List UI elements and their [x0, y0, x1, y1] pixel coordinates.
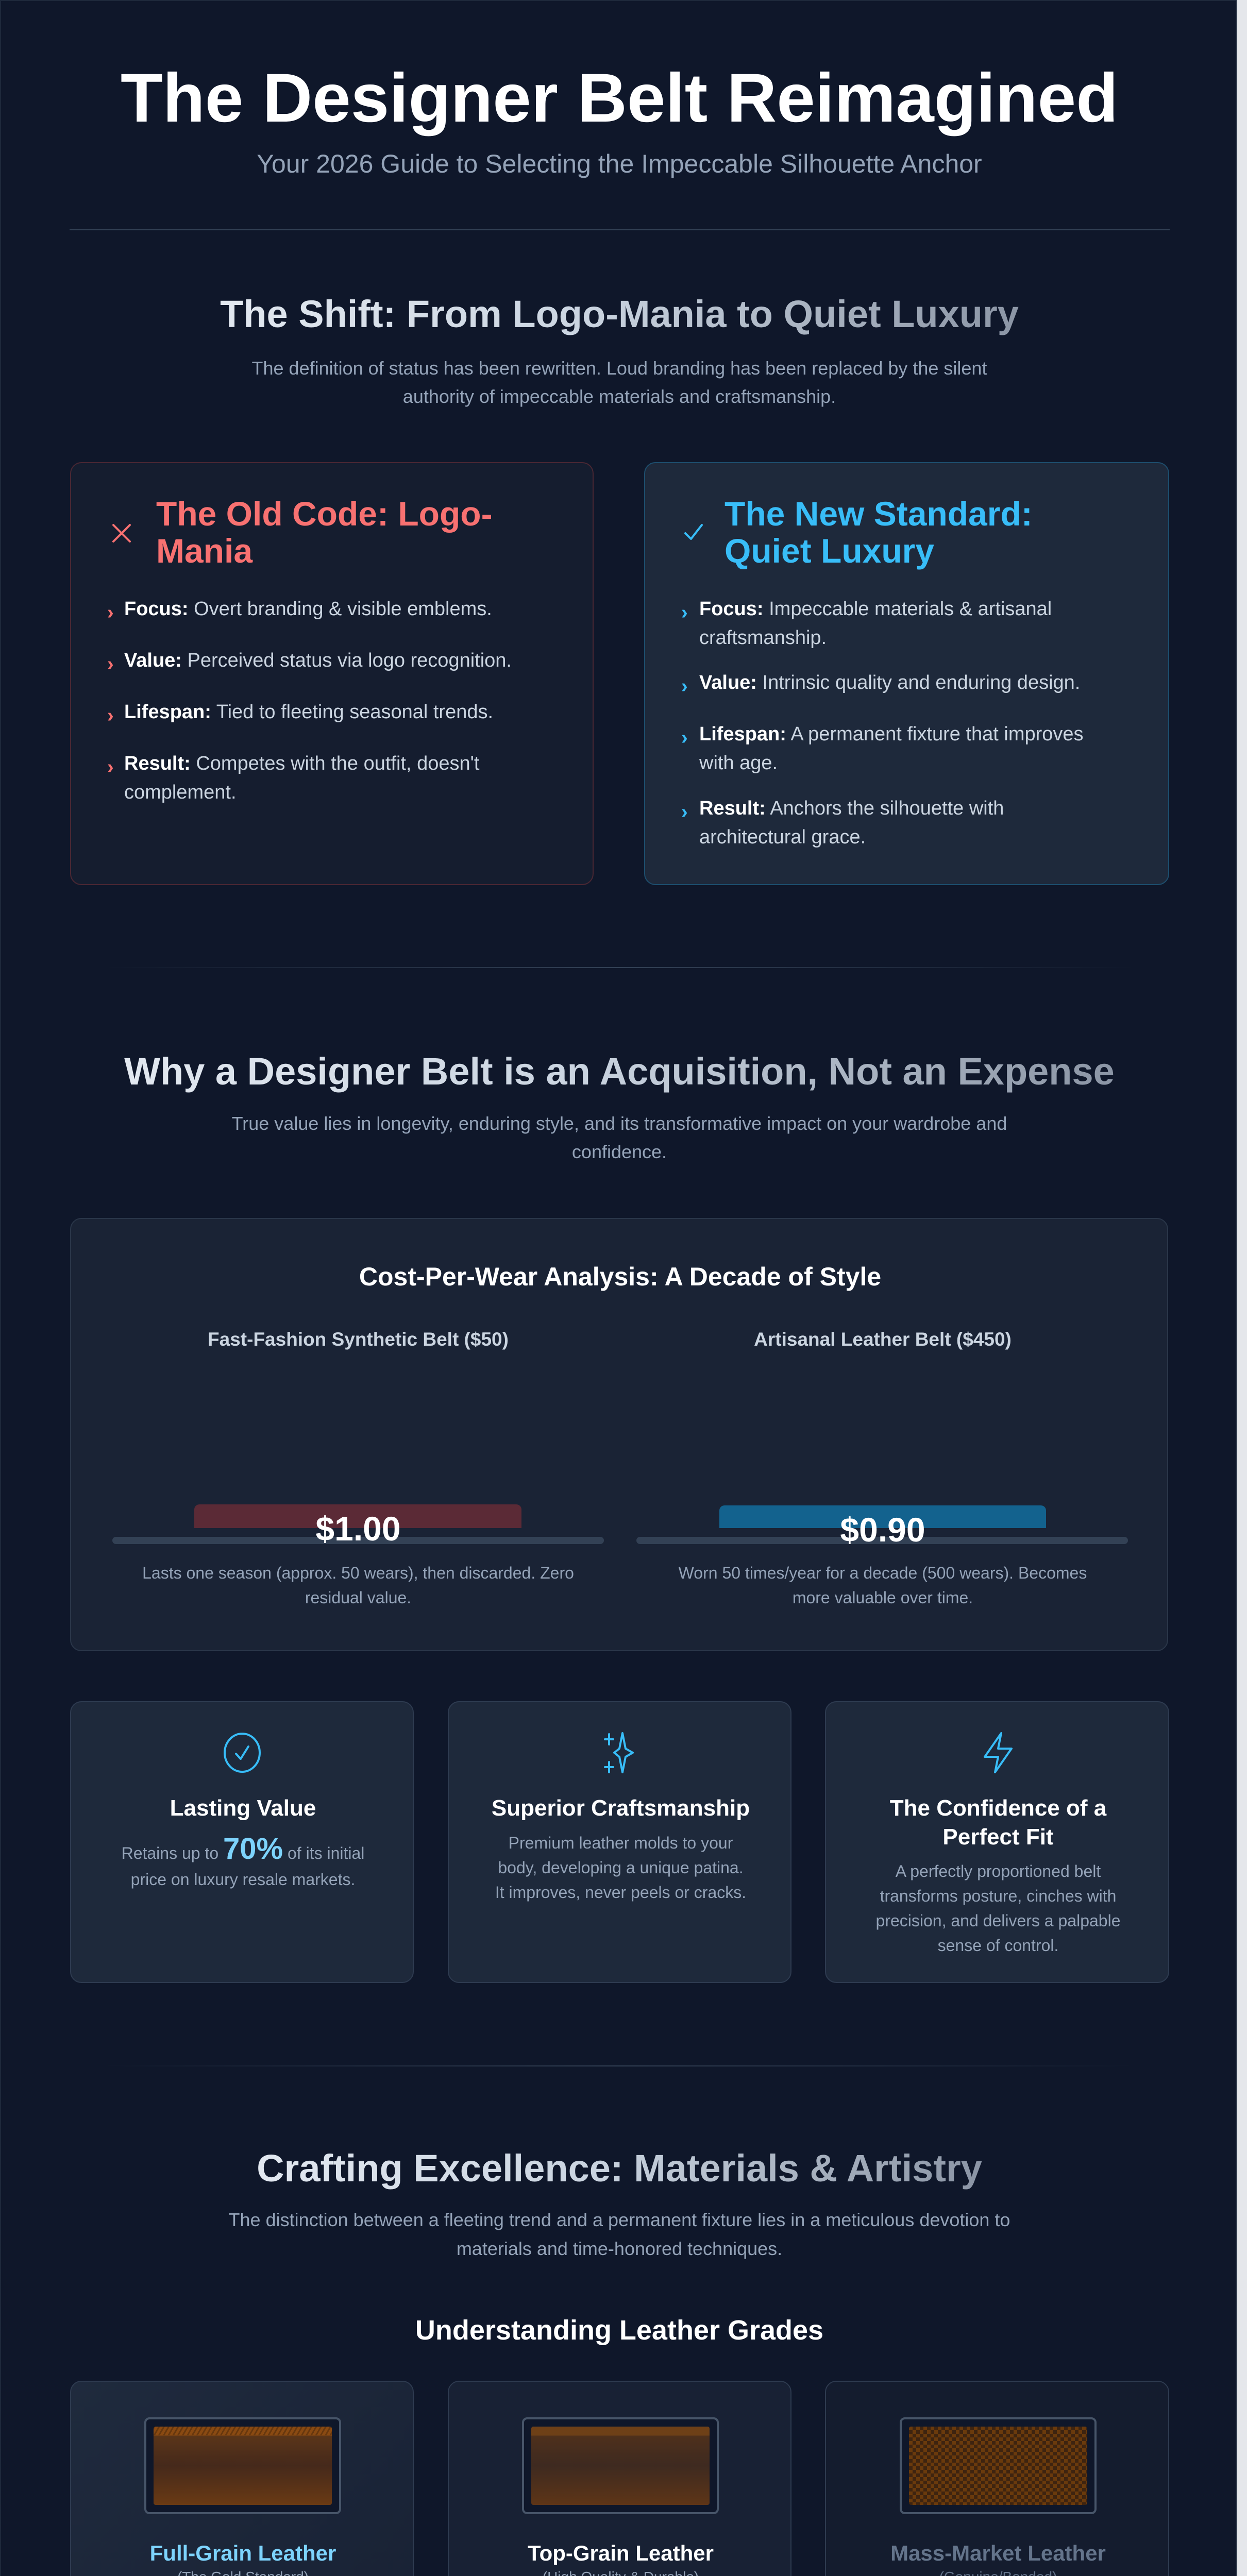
- label: artisanal: Artisanal Leather Belt ($450): [754, 1329, 1012, 1350]
- list: new standard points: Focus: Impeccable materials & artisanal: [699, 598, 1052, 620]
- name: Top-Grain Leather: [528, 2541, 714, 2565]
- icon: cross: [112, 523, 131, 543]
- description: transforms posture, cinches with: [880, 1887, 1116, 1905]
- note: artisanal: [678, 1564, 1087, 1607]
- note: fast fashion: [142, 1564, 574, 1607]
- description: precision, and delivers a palpable: [876, 1911, 1120, 1930]
- intro text: the shift: authority of impeccable materials and craftsmanship.: [403, 386, 836, 407]
- description: It improves, never peels or cracks.: [495, 1883, 746, 1902]
- heading: new standard: The New Standard:: [724, 495, 1033, 533]
- intro text: acquisition: True value lies in longevity, enduring style, and its transformative impact on your wardrobe and: [232, 1113, 1007, 1134]
- heading: new standard: Quiet Luxury: [724, 532, 934, 570]
- list: old code points: ›: [107, 653, 114, 675]
- list: new standard points: Result: Anchors the silhouette with: [699, 798, 1004, 819]
- heading: new standard: [724, 495, 1033, 570]
- intro text: the shift: [252, 358, 987, 407]
- label: fast fashion: Fast-Fashion Synthetic Belt ($50): [208, 1329, 509, 1350]
- subheading: leather grades: Understanding Leather Grades: [415, 2315, 823, 2346]
- icon: sparkles: [604, 1732, 634, 1773]
- description: A perfectly proportioned belt: [896, 1862, 1101, 1880]
- title: The Confidence of a: [890, 1795, 1106, 1821]
- note: artisanal: more valuable over time.: [793, 1588, 973, 1607]
- note: fast fashion: Lasts one season (approx. 50 wears), then discarded. Zero: [142, 1564, 574, 1582]
- description: body, developing a unique patina.: [498, 1858, 744, 1877]
- list: old code points: Focus: Overt branding & visible emblems.: [124, 598, 492, 620]
- list: old code points: Result: Competes with the outfit, doesn't: [124, 753, 479, 774]
- panel: top-grain: [448, 2381, 791, 2576]
- heading: old code: The Old Code: Logo-: [156, 495, 493, 533]
- title: Superior Craftsmanship: [492, 1795, 750, 1821]
- intro text: acquisition: confidence.: [572, 1141, 667, 1162]
- list: new standard points: architectural grace.: [699, 826, 866, 848]
- list: old code points: ›: [107, 756, 114, 778]
- intro text: crafting: materials and time-honored techniques.: [457, 2238, 782, 2259]
- list: new standard points: ›: [681, 602, 688, 623]
- panel: full-grain: [70, 2381, 414, 2576]
- bar: artisanal: [719, 1505, 1046, 1528]
- list: old code points: Lifespan: Tied to fleeting seasonal trends.: [124, 701, 493, 723]
- swatch: mass-market: [900, 2417, 1097, 2514]
- description: price on luxury resale markets.: [131, 1870, 355, 1889]
- note: artisanal: Worn 50 times/year for a decade (500 wears). Becomes: [679, 1564, 1087, 1582]
- icon: check: [684, 523, 703, 540]
- name: Mass-Market Leather: [890, 2541, 1106, 2565]
- list: new standard points: ›: [681, 675, 688, 697]
- list: new standard points: ›: [681, 801, 688, 823]
- title: Lasting Value: [170, 1795, 316, 1821]
- heading: old code: [156, 495, 493, 570]
- intro text: the shift: The definition of status has been rewritten. Loud branding has been replaced by the silent: [252, 358, 987, 379]
- list: new standard points: with age.: [699, 752, 778, 774]
- value: $1.00: $1.00: [315, 1510, 401, 1548]
- swatch: full-grain: [144, 2417, 341, 2514]
- heading: the shift: The Shift: From Logo-Mania to Quiet Luxury: [220, 293, 1019, 335]
- description: [876, 1862, 1120, 1955]
- list: new standard points: Lifespan: A permanent fixture that improves: [699, 723, 1084, 745]
- title: [890, 1795, 1107, 1850]
- chart title: Cost-Per-Wear Analysis: A Decade of Style: [359, 1262, 881, 1291]
- heading: old code: Mania: [156, 532, 252, 570]
- swatch: top-grain: [522, 2417, 719, 2514]
- bar: fast fashion: [194, 1504, 521, 1528]
- panel: lasting value: [70, 1701, 414, 1983]
- description: sense of control.: [938, 1936, 1058, 1955]
- icon: lightning: [983, 1732, 1013, 1773]
- intro text: acquisition: [232, 1113, 1007, 1162]
- note: fast fashion: residual value.: [305, 1588, 411, 1607]
- heading: crafting excellence: Crafting Excellence: Materials & Artistry: [257, 2147, 982, 2190]
- list: old code points: complement.: [124, 782, 237, 803]
- list: old code points: Value: Perceived status via logo recognition.: [124, 650, 512, 671]
- description: [495, 1834, 746, 1902]
- name: Full-Grain Leather: [150, 2541, 336, 2565]
- list: old code points: [107, 598, 512, 803]
- panel: cost-per-wear chart: [70, 1218, 1168, 1651]
- panel: old code: [70, 462, 594, 885]
- description: [122, 1832, 364, 1889]
- description: Retains up to 70% of its initial: [122, 1832, 364, 1866]
- heading: acquisition: Why a Designer Belt is an Acquisition, Not an Expense: [124, 1050, 1115, 1093]
- list: new standard points: Value: Intrinsic quality and enduring design.: [699, 672, 1080, 693]
- intro text: crafting: The distinction between a fleeting trend and a permanent fixture lies in a meticulous devotion to: [229, 2209, 1010, 2230]
- description: Premium leather molds to your: [509, 1834, 733, 1852]
- panel: craftsmanship: [448, 1701, 791, 1983]
- list: new standard points: craftsmanship.: [699, 627, 827, 649]
- list: new standard points: [681, 598, 1084, 848]
- list: old code points: ›: [107, 602, 114, 623]
- list: new standard points: ›: [681, 727, 688, 749]
- title: Perfect Fit: [942, 1824, 1054, 1850]
- value: $0.90: $0.90: [840, 1511, 925, 1549]
- panel: confidence: [825, 1701, 1169, 1983]
- list: old code points: ›: [107, 705, 114, 726]
- title: The Designer Belt Reimagined: [121, 60, 1118, 137]
- subtitle: Your 2026 Guide to Selecting the Impeccable Silhouette Anchor: [257, 149, 982, 178]
- panel: new standard: [644, 462, 1169, 885]
- icon: check circle: [224, 1733, 261, 1773]
- panel: mass-market: [825, 2381, 1169, 2576]
- intro text: crafting: [229, 2209, 1010, 2259]
